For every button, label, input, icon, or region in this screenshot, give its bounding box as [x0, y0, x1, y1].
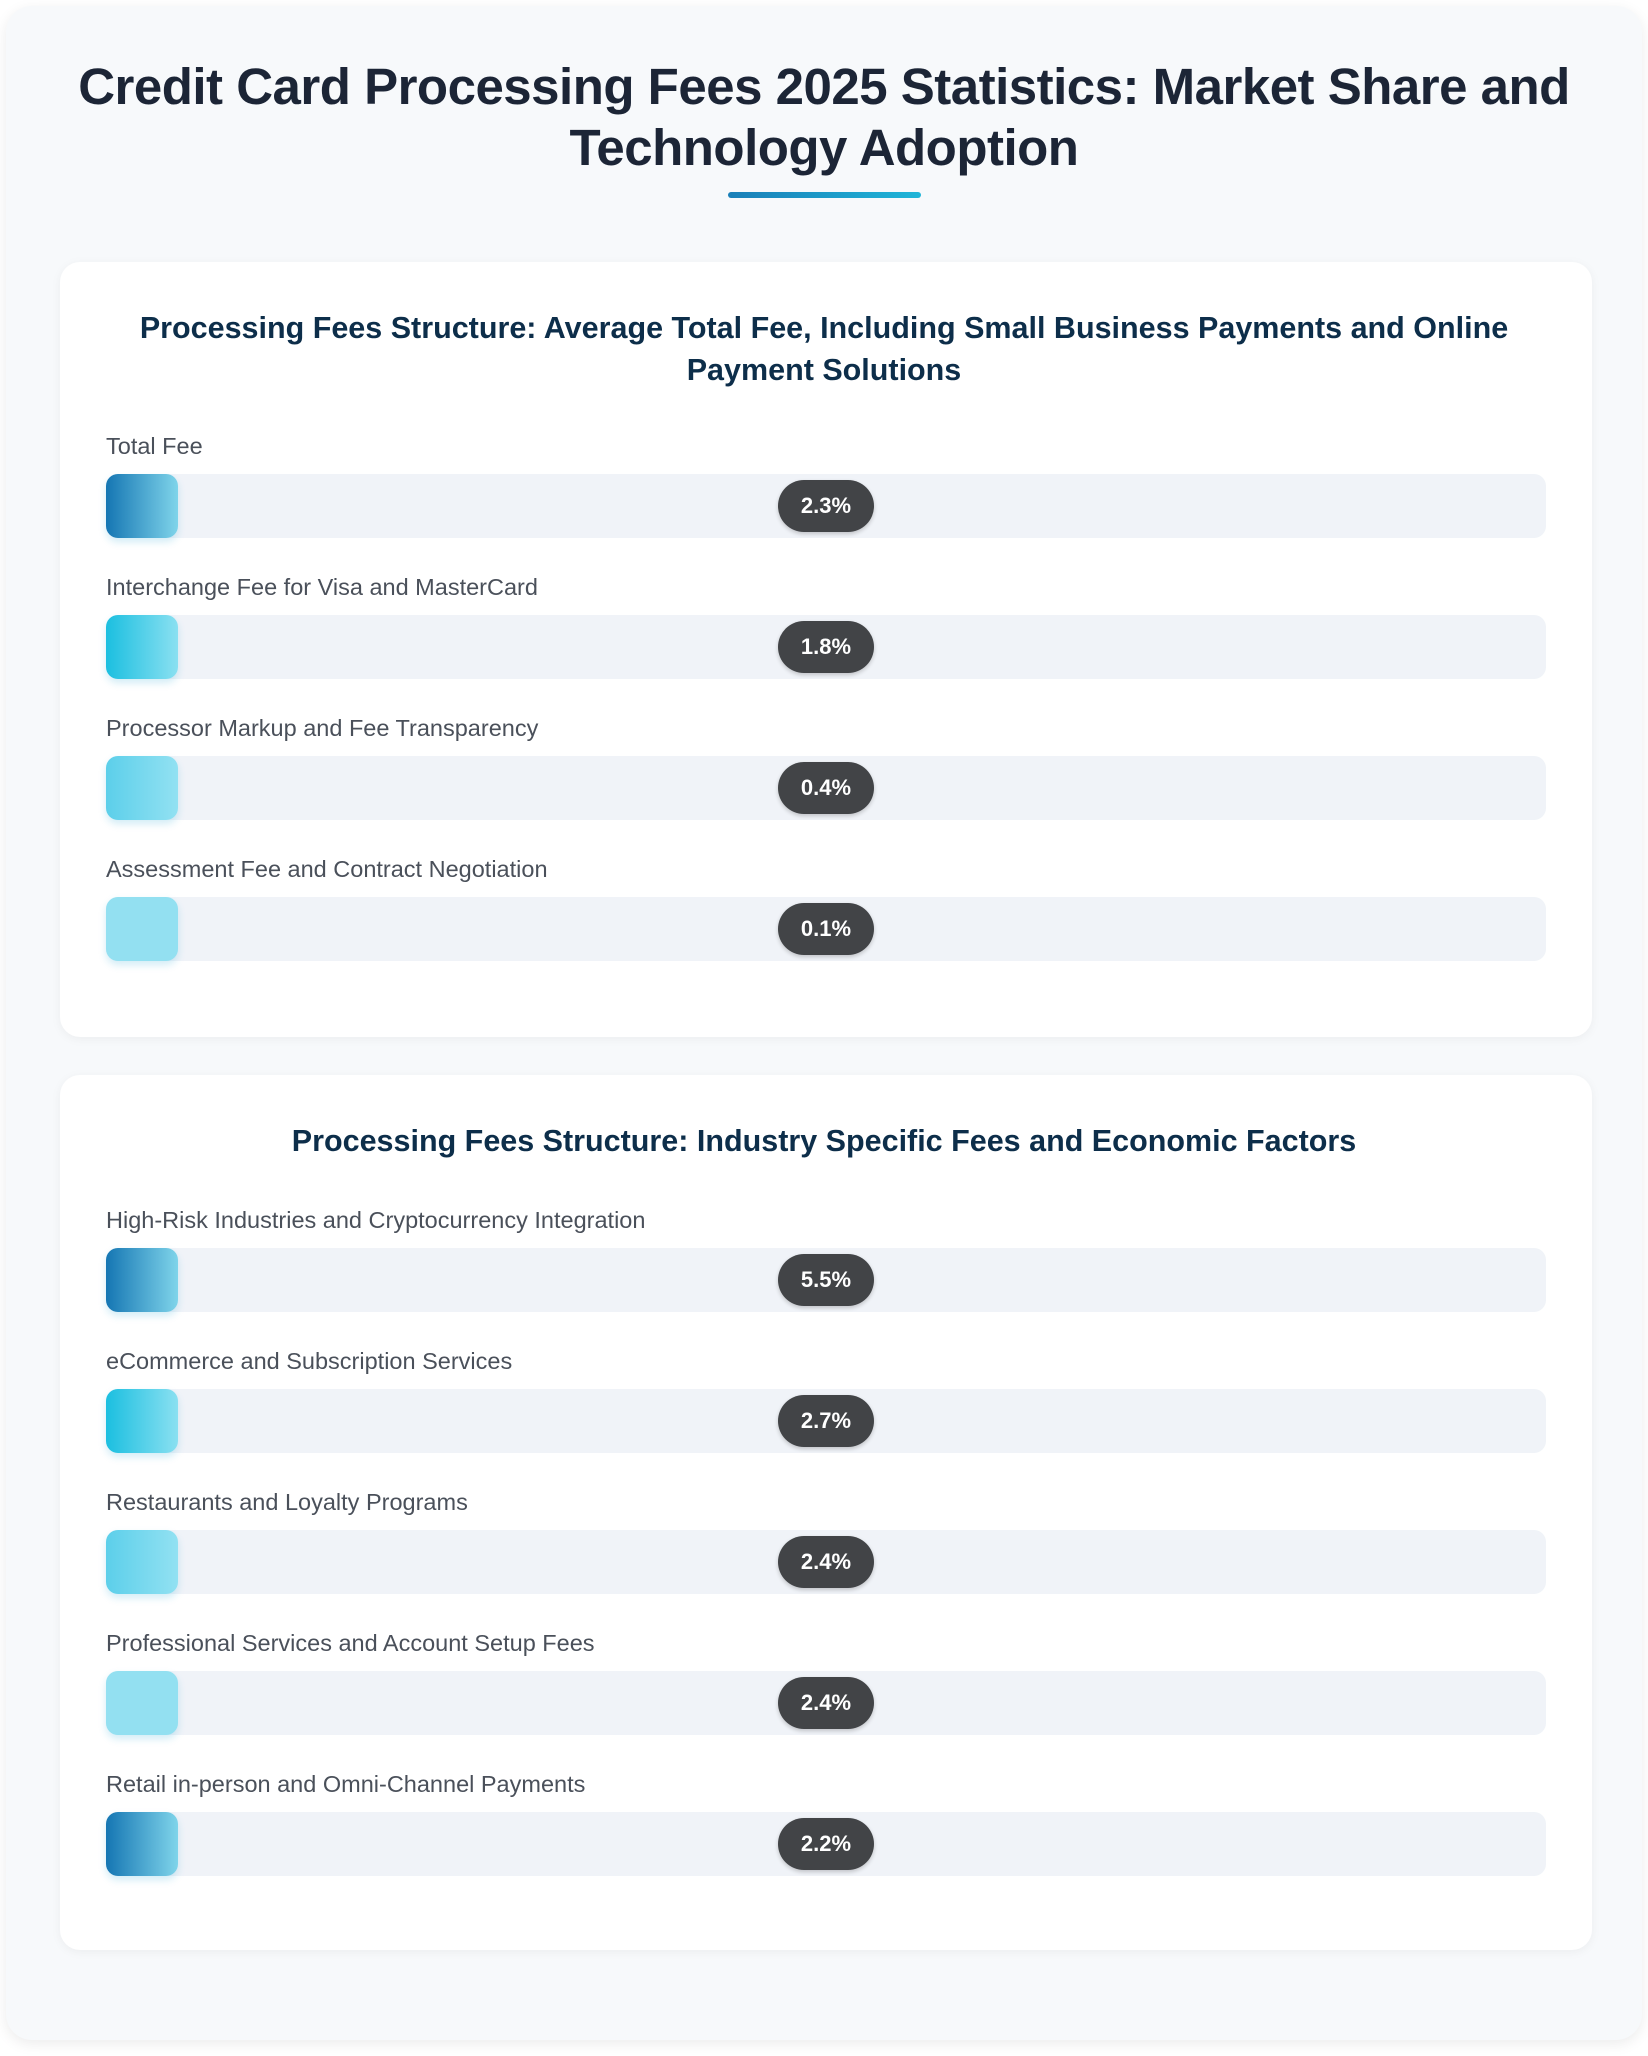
bar: eCommerce: eCommerce and Subscription Services [106, 1348, 512, 1374]
title underline [728, 192, 921, 198]
bar: Restaurants [102, 1489, 1546, 1602]
bar: High-Risk [102, 1207, 1546, 1320]
title [78, 58, 1570, 176]
bar: Interchange Fee [102, 574, 1546, 686]
bar: Interchange Fee: Interchange Fee for Visa and MasterCard [106, 574, 538, 600]
bar: Assessment Fee: 0.1% [801, 916, 851, 941]
bar: High-Risk: High-Risk Industries and Cryptocurrency Integration [106, 1207, 645, 1233]
bar: Processor Markup: Processor Markup and Fee Transparency [106, 715, 538, 741]
bar: Restaurants: Restaurants and Loyalty Programs [106, 1489, 468, 1515]
title: Credit Card Processing Fees 2025 Statistics: Market Share and [78, 58, 1570, 115]
panel: average total fee [60, 262, 1592, 1037]
bar: Interchange Fee: 1.8% [801, 634, 851, 659]
bar: Professional Services: Professional Services and Account Setup Fees [106, 1630, 595, 1656]
panel title [140, 311, 1508, 387]
panel title: Payment Solutions [687, 353, 961, 387]
bar: Total Fee: Total Fee [106, 433, 203, 459]
bar: Retail: Retail in-person and Omni-Channel Payments [106, 1771, 585, 1797]
bar: eCommerce: 2.7% [801, 1408, 851, 1433]
bar: Assessment Fee: Assessment Fee and Contract Negotiation [106, 856, 548, 882]
bar: Restaurants: 2.4% [801, 1549, 851, 1574]
bar: Assessment Fee [102, 856, 1546, 968]
bar: Total Fee [102, 433, 1546, 546]
bar: Professional Services [102, 1630, 1546, 1742]
bar: High-Risk: 5.5% [801, 1267, 851, 1292]
bar: Retail [102, 1771, 1546, 1884]
bar: eCommerce [102, 1348, 1546, 1460]
panel title: Processing Fees Structure: Industry Specific Fees and Economic Factors [292, 1124, 1356, 1158]
bar: Retail: 2.2% [801, 1831, 851, 1856]
bar: Professional Services: 2.4% [801, 1690, 851, 1715]
bar: Processor Markup: 0.4% [801, 775, 851, 800]
panel title: Processing Fees Structure: Average Total Fee, Including Small Business Payments and Online [140, 311, 1508, 345]
panel: industry specific fees [60, 1075, 1592, 1950]
bar: Total Fee: 2.3% [801, 493, 851, 518]
bar: Processor Markup [102, 715, 1546, 828]
title: Technology Adoption [570, 119, 1078, 176]
